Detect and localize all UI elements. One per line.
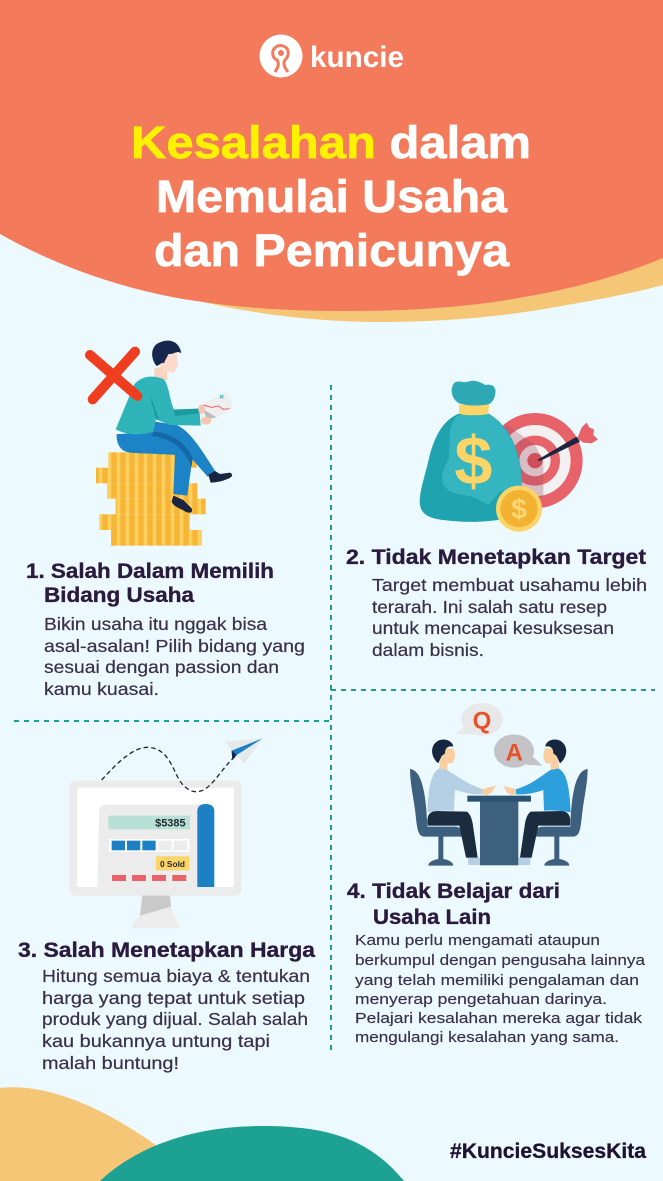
title: [131, 117, 531, 276]
heading: 1. Salah Dalam Memilih: [26, 559, 274, 583]
text block: sesuai dengan passion dan: [44, 657, 279, 677]
logo: [260, 34, 404, 78]
text block: produk yang dijual. Salah salah: [42, 1009, 308, 1029]
text block: [355, 932, 646, 1046]
panel: mistake 2: [346, 381, 647, 660]
text block: asal-asalan! Pilih bidang yang: [44, 636, 305, 656]
header banner: [0, 0, 663, 322]
title: dan Pemicunya: [154, 225, 510, 276]
icon: money bag and target: $: [511, 494, 527, 525]
panel: mistake 1: [26, 341, 305, 699]
text block: Target membuat usahamu lebih: [372, 575, 647, 595]
text block: malah buntung!: [42, 1053, 179, 1073]
text block: Hitung semua biaya & tentukan: [42, 966, 310, 986]
heading: 2. Tidak Menetapkan Target: [346, 545, 646, 569]
heading: Bidang Usaha: [44, 583, 195, 607]
text block: kamu kuasai.: [44, 679, 159, 699]
text block: Bikin usaha itu nggak bisa: [44, 614, 267, 634]
text block: terarah. Ini salah satu resep: [372, 597, 607, 617]
heading: [347, 879, 560, 929]
heading: 4. Tidak Belajar dari: [347, 879, 560, 903]
icon: price monitor with paper plane: [69, 738, 263, 928]
heading: [26, 559, 274, 607]
text block: kau bukannya untung tapi: [42, 1031, 270, 1051]
text block: harga yang tepat untuk setiap: [42, 988, 305, 1008]
text block: berkumpul dengan pengusaha lainnya: [355, 952, 646, 969]
heading: 3. Salah Menetapkan Harga: [18, 938, 316, 962]
dashed dividers: [14, 385, 655, 1052]
icon: two people talking at a table: [410, 703, 588, 866]
icon: price monitor with paper plane: 0 Sold: [160, 859, 185, 869]
text block: Kamu perlu mengamati ataupun: [355, 932, 600, 949]
footer hills: [0, 1087, 404, 1181]
text block: [42, 966, 310, 1073]
title: Memulai Usaha: [156, 171, 508, 222]
heading: Usaha Lain: [373, 905, 491, 929]
icon: two people talking at a table: Q: [473, 707, 491, 734]
icon: two people talking at a table: A: [506, 739, 523, 766]
title: Kesalahan dalam: [131, 117, 531, 168]
text block: mengulangi kesalahan yang sama.: [355, 1029, 619, 1046]
text block: Pelajari kesalahan mereka agar tidak: [355, 1010, 643, 1027]
panel: mistake 4: [347, 703, 646, 1046]
icon: person sitting on coins: [90, 341, 233, 546]
text block: [372, 575, 647, 660]
chairs: [410, 769, 588, 866]
panel: mistake 3: [18, 738, 316, 1073]
icon: money bag and target: $: [454, 423, 492, 499]
text block: yang telah memiliki pengalaman dan: [355, 972, 639, 989]
icon: price monitor with paper plane: $5385: [155, 818, 186, 830]
icon: money bag and target: [420, 381, 598, 532]
text block: dalam bisnis.: [372, 640, 484, 660]
hashtag: #KuncieSuksesKita: [450, 1140, 646, 1163]
text block: [44, 614, 305, 699]
logo: kuncie: [310, 41, 404, 74]
text block: untuk mencapai kesuksesan: [372, 618, 614, 638]
text block: menyerap pengetahuan darinya.: [355, 991, 607, 1008]
